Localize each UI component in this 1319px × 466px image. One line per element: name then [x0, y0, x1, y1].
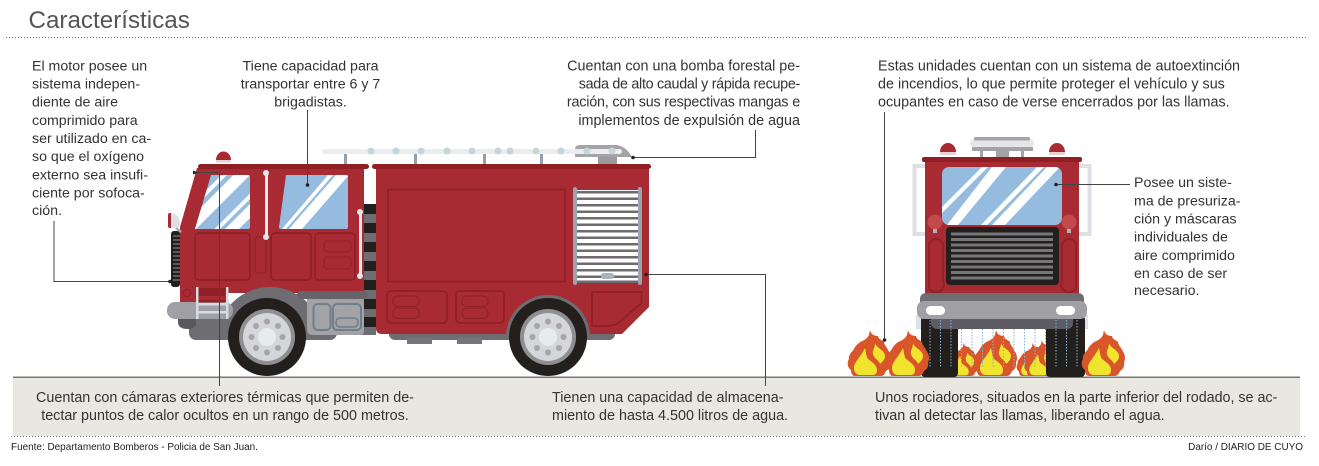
- stripes between cab and body: [364, 204, 376, 334]
- text: pressurization: necesario.: [1134, 283, 1199, 299]
- title dotted rule: [6, 36, 1306, 38]
- roof equipment: [970, 137, 1034, 158]
- siren: [216, 152, 231, 162]
- text: engine air system: diente de aire: [32, 95, 118, 111]
- rear body: [376, 169, 649, 334]
- footer dotted rule: [11, 436, 1307, 438]
- tires: [921, 316, 1085, 377]
- mirror: [168, 213, 181, 232]
- cab body: [180, 168, 364, 302]
- water pump nozzle: [575, 145, 632, 165]
- text: forest pump: sada de alto caudal y rápida recupe-: [579, 76, 801, 92]
- text: pressurization: aire comprimido: [1134, 248, 1235, 264]
- grab handles: [263, 170, 363, 279]
- title: Características: [28, 7, 190, 34]
- large side panel: [388, 190, 565, 282]
- leader lines: [54, 110, 1130, 386]
- text: thermal cameras: tectar puntos de calor ocultos en un rango de 500 metros.: [41, 408, 409, 424]
- water spray: [930, 320, 1077, 368]
- side view fire truck: [167, 145, 651, 376]
- windshield: [942, 167, 1062, 225]
- source: Fuente: Departamento Bomberos - Policia de San Juan.: [11, 442, 258, 453]
- front wheel arch: [217, 287, 323, 340]
- text: engine air system: El motor posee un: [32, 58, 147, 74]
- rear wheel: [506, 295, 590, 376]
- front grille large: [946, 227, 1059, 285]
- ground band: [13, 376, 1300, 436]
- roof ladder: [322, 148, 622, 164]
- front roof bar: [922, 157, 1082, 162]
- cab roof bar: [198, 164, 369, 169]
- step ladder: [196, 287, 228, 319]
- text: crew capacity: transportar entre 6 y 7: [241, 76, 380, 92]
- text: self-extinguishing: ocupantes en caso de verse encerrados por las llamas.: [878, 95, 1230, 111]
- text: engine air system: so que el oxígeno: [32, 149, 144, 165]
- cab door panels: [184, 233, 355, 296]
- text: engine air system: ser utilizado en ca-: [32, 131, 151, 147]
- text: engine air system: sistema indepen-: [32, 76, 140, 92]
- lockers: [387, 291, 642, 326]
- text: crew capacity: Tiene capacidad para: [243, 58, 379, 74]
- chassis: [178, 318, 615, 344]
- text: crew capacity: brigadistas.: [274, 95, 347, 111]
- text: self-extinguishing: de incendios, lo que permite proteger el vehículo y sus: [878, 76, 1225, 92]
- flames behind the truck: [948, 340, 1058, 376]
- front view fire truck: [848, 137, 1125, 377]
- roller shutter: [573, 187, 642, 285]
- text: pressurization: en caso de ser: [1134, 266, 1227, 282]
- flames in front: [848, 330, 1125, 376]
- sirens: [940, 143, 1065, 155]
- headlights: [928, 214, 1076, 292]
- text: pressurization: ción y máscaras: [1134, 212, 1236, 228]
- cab windows: [195, 175, 348, 229]
- text: forest pump: ración, con sus respectivas mangas e: [567, 95, 800, 111]
- text: self-extinguishing: Estas unidades cuentan con un sistema de autoextinción: [878, 58, 1240, 74]
- front bumper: [917, 301, 1087, 329]
- front bumper: [167, 302, 233, 319]
- credit: Darío / DIARIO DE CUYO: [1188, 442, 1303, 453]
- front grille: [171, 231, 180, 287]
- leader dots: [168, 156, 1058, 342]
- text: forest pump: implementos de expulsión de agua: [578, 113, 800, 129]
- text: water capacity: miento de hasta 4.500 litros de agua.: [552, 408, 788, 424]
- front cab: [925, 160, 1079, 294]
- rear roof bar: [372, 164, 651, 169]
- text: pressurization: Posee un siste-: [1134, 175, 1232, 191]
- text: engine air system: comprimido para: [32, 113, 138, 129]
- text: engine air system: ciente por sofoca-: [32, 185, 145, 201]
- text: pressurization: individuales de: [1134, 230, 1228, 246]
- text: forest pump: Cuentan con una bomba forestal pe-: [567, 58, 800, 74]
- front wheel: [228, 298, 306, 376]
- side compartment: [297, 291, 368, 335]
- text: engine air system: externo sea insufi-: [32, 167, 148, 183]
- text: sprinklers: tivan al detectar las llamas, liberando el agua.: [875, 408, 1165, 424]
- undercarriage: [916, 293, 1088, 329]
- text: water capacity: Tienen una capacidad de almacena-: [552, 390, 784, 406]
- text: engine air system: ción.: [32, 203, 62, 219]
- text: pressurization: ma de presuriza-: [1134, 193, 1241, 209]
- text: sprinklers: Unos rociadores, situados en la parte inferior del rodado, se ac-: [875, 390, 1278, 406]
- text: thermal cameras: Cuentan con cámaras exteriores térmicas que permiten de-: [36, 390, 414, 406]
- side mirror rails: [914, 166, 1090, 234]
